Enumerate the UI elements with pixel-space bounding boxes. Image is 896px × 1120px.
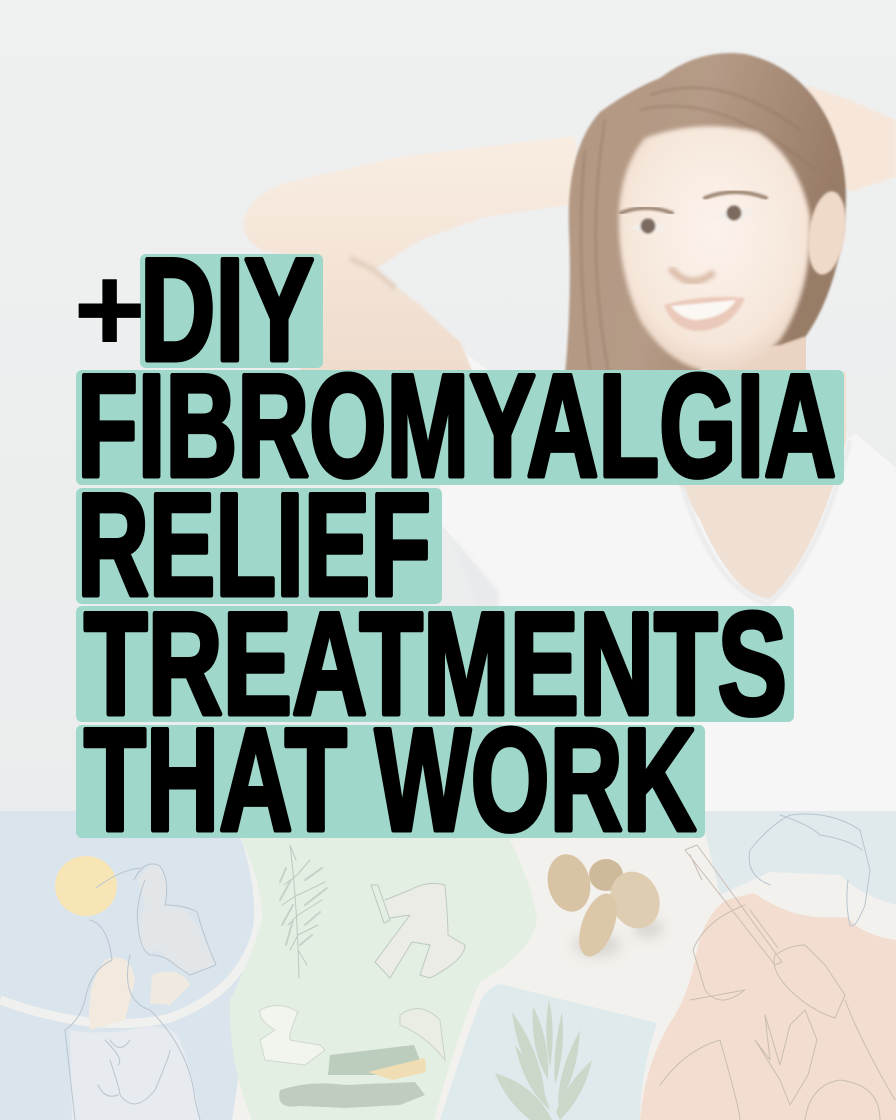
raised arm	[243, 136, 580, 375]
label: DIY: +	[74, 241, 145, 377]
hair	[565, 53, 846, 375]
line figure: left panel	[65, 864, 216, 1120]
line figure: stretching body	[371, 883, 465, 978]
panel: cream base	[0, 811, 896, 1120]
object: ginger root pieces	[542, 850, 668, 961]
neck	[720, 325, 806, 375]
armpit shadow	[350, 258, 395, 288]
face	[619, 126, 810, 372]
photo: smiling woman with arms behind head	[243, 53, 896, 812]
crumpled towel and compress items	[260, 1005, 445, 1108]
title	[74, 228, 844, 861]
second hand behind head	[806, 85, 896, 192]
ear	[803, 189, 851, 277]
icon: sun	[55, 856, 117, 916]
nose	[672, 270, 712, 281]
panel: left blue	[0, 811, 258, 1120]
panel: white ring	[0, 815, 259, 1024]
hair strands	[581, 88, 815, 370]
smile	[664, 297, 745, 331]
shirt	[440, 345, 896, 812]
palm leaf	[495, 1000, 592, 1120]
label: DIY: DIY	[140, 228, 314, 391]
sprig plant	[280, 845, 327, 978]
shirt fold shading	[450, 535, 505, 700]
bottom illustration panels	[0, 811, 896, 1120]
panel: green	[230, 838, 537, 1120]
panel: top right light blue	[700, 811, 896, 905]
chest skin	[650, 372, 846, 598]
line figure: massage tool and hands on back	[660, 814, 896, 1120]
collar edge	[682, 440, 850, 604]
panel: peach	[640, 893, 896, 1120]
label: RELIEF: RELIEF	[77, 463, 431, 626]
label: DIY	[74, 228, 323, 391]
panel: lower middle blue	[440, 984, 657, 1120]
eyes	[631, 206, 755, 234]
brows	[621, 208, 672, 213]
